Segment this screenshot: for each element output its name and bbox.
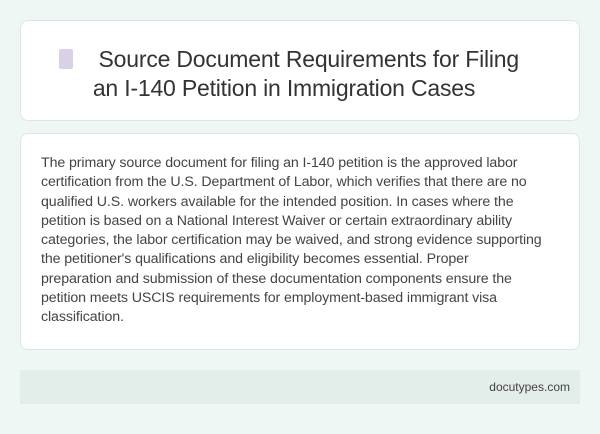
body paragraph: petition is based on a National Interest Waiver or certain extraordinary ability [41, 213, 512, 229]
body paragraph: The primary source document for filing an I-140 petition is the approved labor [41, 155, 517, 171]
header card [20, 20, 580, 121]
footer text: docutypes.com [489, 380, 570, 394]
body paragraph: the petitioner's qualifications and eligibility becomes essential. Proper [41, 251, 469, 267]
title: an I-140 Petition in Immigration Cases [93, 75, 475, 101]
body paragraph: categories, the labor certification may be waived, and strong evidence supporting [41, 232, 542, 248]
title: Source Document Requirements for Filing [99, 46, 519, 72]
body paragraph: preparation and submission of these documentation components ensure the [41, 271, 512, 287]
body paragraph: petition meets USCIS requirements for employment-based immigrant visa [41, 290, 497, 306]
body paragraph: qualified U.S. workers available for the intended position. In cases where the [41, 194, 513, 210]
body text card [20, 133, 580, 350]
body paragraph: certification from the U.S. Department of Labor, which verifies that there are no [41, 174, 527, 190]
title [93, 46, 519, 101]
body paragraph [41, 155, 542, 325]
footer [20, 370, 580, 404]
body paragraph: classification. [41, 309, 124, 325]
icon: document [59, 49, 73, 69]
